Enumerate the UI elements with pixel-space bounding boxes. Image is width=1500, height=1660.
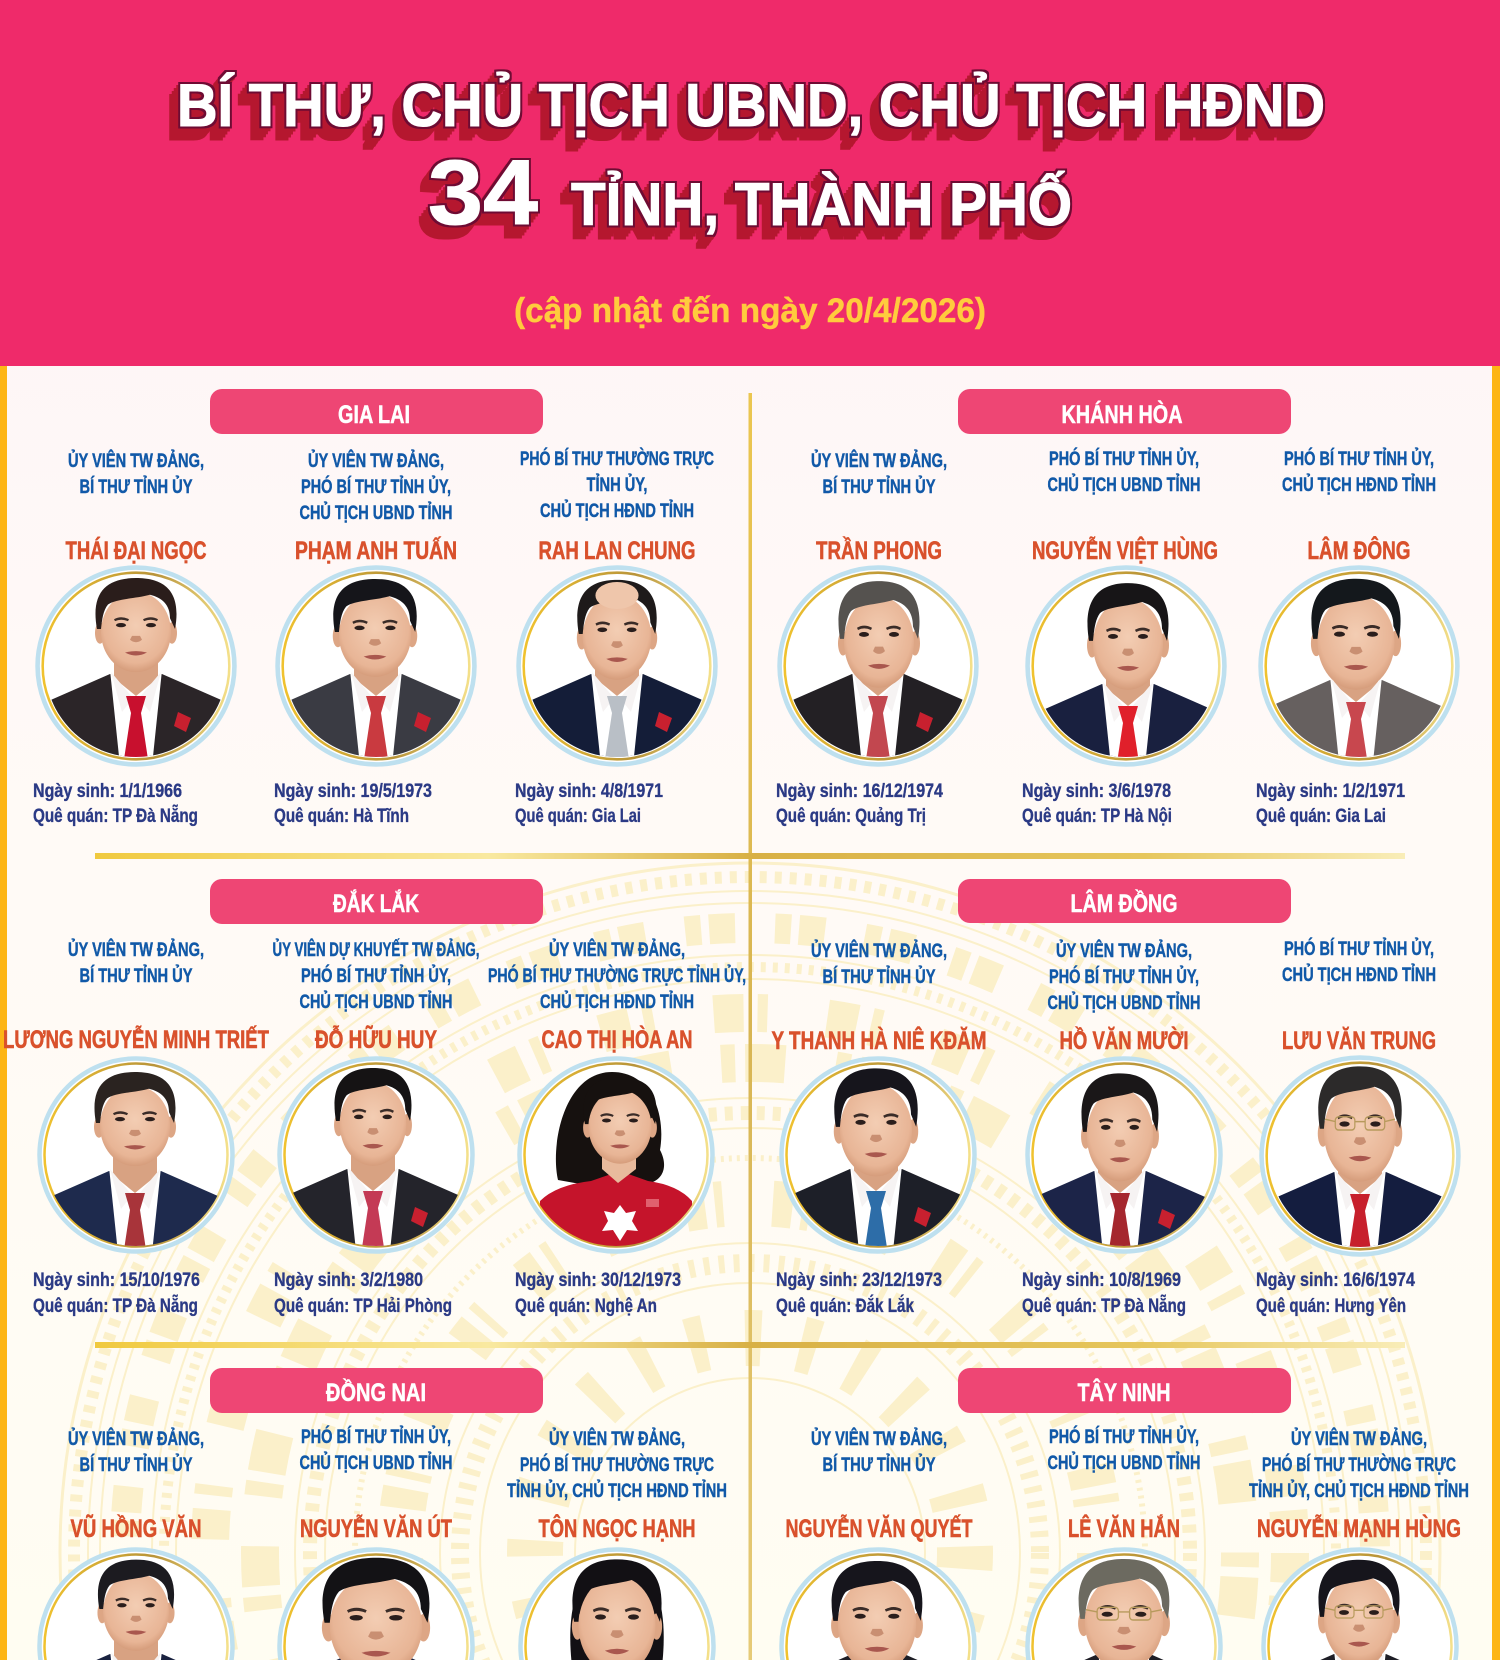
province label: Lâm Đồng: LÂM ĐỒNG: [1070, 888, 1178, 918]
person: Trần Phong: Ngày sinh: 16/12/1974: [776, 780, 943, 802]
person: Đỗ Hữu Huy: [272, 937, 480, 1317]
person: Hồ Văn Mười: CHỦ TỊCH UBND TỈNH: [1048, 990, 1200, 1014]
person: Hồ Văn Mười: Ngày sinh: 10/8/1969: [1022, 1269, 1181, 1291]
person: Tôn Ngọc Hạnh: [507, 1426, 727, 1660]
person: Cao Thị Hòa An: Ngày sinh: 30/12/1973: [515, 1269, 681, 1291]
title: [177, 72, 1325, 244]
province label: Khánh Hòa: KHÁNH HÒA: [1062, 399, 1182, 429]
person: Trần Phong: TRẦN PHONG: [816, 536, 942, 565]
person: Vũ Hồng Văn: [40, 1426, 232, 1660]
panel: Gia Lai: [33, 389, 715, 827]
person: Thái Đại Ngọc: Ngày sinh: 1/1/1966: [33, 780, 182, 802]
person: Rah Lan Chung: [515, 446, 715, 827]
person: Đỗ Hữu Huy: PHÓ BÍ THƯ TỈNH ỦY,: [301, 963, 451, 987]
person: Cao Thị Hòa An: [488, 937, 746, 1317]
person: Nguyễn Việt Hùng: Quê quán: TP Hà Nội: [1022, 805, 1172, 827]
person: Tôn Ngọc Hạnh: TÔN NGỌC HẠNH: [538, 1513, 696, 1543]
person: Trần Phong: BÍ THƯ TỈNH ỦY: [822, 474, 936, 498]
panel: Đồng Nai: [40, 1368, 727, 1660]
person: Trần Phong: ỦY VIÊN TW ĐẢNG,: [811, 448, 947, 472]
person: Cao Thị Hòa An: PHÓ BÍ THƯ THƯỜNG TRỰC TỈNH ỦY,: [488, 963, 746, 987]
person: Thái Đại Ngọc: BÍ THƯ TỈNH ỦY: [80, 474, 192, 498]
person: Lưu Văn Trung: [1256, 936, 1458, 1317]
person: Lưu Văn Trung: PHÓ BÍ THƯ TỈNH ỦY,: [1284, 936, 1434, 960]
person: Y Thanh Hà Niê Kđăm: Quê quán: Đắk Lắk: [776, 1293, 914, 1317]
person: Rah Lan Chung: Quê quán: Gia Lai: [515, 805, 641, 827]
person: Lâm Đông: PHÓ BÍ THƯ TỈNH ỦY,: [1284, 446, 1434, 470]
person: Rah Lan Chung: RAH LAN CHUNG: [538, 537, 696, 565]
title: TỈNH, THÀNH PHỐ: [571, 171, 1072, 238]
side bars: [0, 366, 1500, 1660]
person: Đỗ Hữu Huy: CHỦ TỊCH UBND TỈNH: [300, 989, 452, 1013]
person: Y Thanh Hà Niê Kđăm: [772, 938, 986, 1317]
person: Rah Lan Chung: Ngày sinh: 4/8/1971: [515, 780, 663, 802]
province label: Lâm Đồng: [958, 879, 1291, 923]
person: Trần Phong: [776, 448, 976, 827]
person: Lương Nguyễn Minh Triết: BÍ THƯ TỈNH ỦY: [80, 963, 192, 987]
person: Vũ Hồng Văn: ỦY VIÊN TW ĐẢNG,: [68, 1426, 204, 1450]
person: Thái Đại Ngọc: [33, 448, 234, 827]
person: Phạm Anh Tuấn: Quê quán: Hà Tĩnh: [274, 805, 409, 827]
panel: Khánh Hòa: [776, 389, 1457, 827]
person: Lâm Đông: LÂM ĐÔNG: [1308, 535, 1410, 565]
person: Đỗ Hữu Huy: Quê quán: TP Hải Phòng: [274, 1295, 452, 1317]
person: Lương Nguyễn Minh Triết: Quê quán: TP Đà Nẵng: [33, 1293, 198, 1317]
panel: Lâm Đồng: [772, 879, 1458, 1317]
person: Nguyễn Văn Quyết: BÍ THƯ TỈNH ỦY: [822, 1452, 936, 1476]
person: Đỗ Hữu Huy: ĐỖ HỮU HUY: [315, 1024, 437, 1054]
header band: [0, 0, 1500, 366]
person: Thái Đại Ngọc: Quê quán: TP Đà Nẵng: [33, 803, 198, 827]
person: Nguyễn Việt Hùng: CHỦ TỊCH UBND TỈNH: [1048, 472, 1200, 496]
person: Y Thanh Hà Niê Kđăm: ỦY VIÊN TW ĐẢNG,: [811, 938, 947, 962]
dividers: [95, 393, 1405, 1660]
title: 34: [428, 142, 538, 244]
person: Đỗ Hữu Huy: Ngày sinh: 3/2/1980: [274, 1269, 423, 1291]
person: Nguyễn Việt Hùng: PHÓ BÍ THƯ TỈNH ỦY,: [1049, 446, 1199, 470]
person: Phạm Anh Tuấn: ỦY VIÊN TW ĐẢNG,: [308, 448, 444, 472]
person: Lê Văn Hắn: PHÓ BÍ THƯ TỈNH ỦY,: [1049, 1424, 1199, 1448]
person: Nguyễn Văn Quyết: ỦY VIÊN TW ĐẢNG,: [811, 1426, 947, 1450]
person: Cao Thị Hòa An: CAO THỊ HÒA AN: [542, 1024, 692, 1054]
person: Thái Đại Ngọc: ỦY VIÊN TW ĐẢNG,: [68, 448, 204, 472]
person: Cao Thị Hòa An: Quê quán: Nghệ An: [515, 1295, 657, 1317]
person: Lưu Văn Trung: LƯU VĂN TRUNG: [1282, 1026, 1436, 1055]
update date: (cập nhật đến ngày 20/4/2026): [514, 292, 986, 330]
person: Phạm Anh Tuấn: CHỦ TỊCH UBND TỈNH: [300, 500, 452, 524]
person: Lương Nguyễn Minh Triết: Ngày sinh: 15/10/1976: [33, 1269, 200, 1291]
person: Trần Phong: Quê quán: Quảng Trị: [776, 805, 926, 827]
person: Hồ Văn Mười: HỒ VĂN MƯỜI: [1060, 1025, 1188, 1055]
province label: Tây Ninh: TÂY NINH: [1078, 1377, 1170, 1407]
province label: Gia Lai: GIA LAI: [338, 401, 410, 429]
person: Lâm Đông: [1256, 446, 1457, 827]
province label: Khánh Hòa: [958, 389, 1291, 434]
person: Nguyễn Văn Út: [280, 1424, 472, 1660]
person: Lưu Văn Trung: Ngày sinh: 16/6/1974: [1256, 1269, 1415, 1291]
person: Tôn Ngọc Hạnh: PHÓ BÍ THƯ THƯỜNG TRỰC: [520, 1452, 714, 1476]
person: Phạm Anh Tuấn: PHÓ BÍ THƯ TỈNH ỦY,: [301, 474, 451, 498]
person: Nguyễn Việt Hùng: Ngày sinh: 3/6/1978: [1022, 780, 1171, 802]
person: Đỗ Hữu Huy: ỦY VIÊN DỰ KHUYẾT TW ĐẢNG,: [272, 937, 480, 961]
province label: Đồng Nai: ĐỒNG NAI: [326, 1377, 426, 1407]
province label: Đắk Lắk: ĐẮK LẮK: [333, 888, 419, 918]
province label: Gia Lai: [210, 389, 543, 434]
person: Cao Thị Hòa An: CHỦ TỊCH HĐND TỈNH: [540, 989, 694, 1013]
person: Phạm Anh Tuấn: [274, 448, 474, 827]
person: Y Thanh Hà Niê Kđăm: BÍ THƯ TỈNH ỦY: [822, 964, 936, 988]
panel: Đắk Lắk: [3, 879, 746, 1317]
person: Nguyễn Văn Út: NGUYỄN VĂN ÚT: [300, 1513, 452, 1543]
person: Nguyễn Văn Út: CHỦ TỊCH UBND TỈNH: [300, 1450, 452, 1474]
person: Hồ Văn Mười: PHÓ BÍ THƯ TỈNH ỦY,: [1049, 964, 1199, 988]
person: Tôn Ngọc Hạnh: TỈNH ỦY, CHỦ TỊCH HĐND TỈNH: [507, 1478, 727, 1502]
person: Nguyễn Mạnh Hùng: [1249, 1426, 1469, 1660]
person: Lương Nguyễn Minh Triết: LƯƠNG NGUYỄN MINH TRIẾT: [3, 1024, 269, 1054]
person: Nguyễn Văn Quyết: [782, 1426, 974, 1660]
province label: Tây Ninh: [958, 1368, 1291, 1413]
person: Lương Nguyễn Minh Triết: [3, 937, 269, 1317]
person: Nguyễn Văn Quyết: NGUYỄN VĂN QUYẾT: [786, 1513, 972, 1543]
person: Phạm Anh Tuấn: PHẠM ANH TUẤN: [295, 536, 457, 565]
person: Y Thanh Hà Niê Kđăm: Ngày sinh: 23/12/1973: [776, 1269, 942, 1291]
person: Lê Văn Hắn: CHỦ TỊCH UBND TỈNH: [1048, 1450, 1200, 1474]
person: Vũ Hồng Văn: BÍ THƯ TỈNH ỦY: [80, 1452, 192, 1476]
person: Lâm Đông: Ngày sinh: 1/2/1971: [1256, 780, 1405, 802]
province label: Đồng Nai: [210, 1368, 543, 1413]
person: Cao Thị Hòa An: ỦY VIÊN TW ĐẢNG,: [549, 937, 685, 961]
person: Nguyễn Việt Hùng: [1022, 446, 1224, 827]
person: Hồ Văn Mười: ỦY VIÊN TW ĐẢNG,: [1056, 938, 1192, 962]
person: Lê Văn Hắn: [1028, 1424, 1220, 1660]
person: Rah Lan Chung: CHỦ TỊCH HĐND TỈNH: [540, 498, 694, 522]
person: Hồ Văn Mười: Quê quán: TP Đà Nẵng: [1022, 1293, 1186, 1317]
person: Lâm Đông: Quê quán: Gia Lai: [1256, 805, 1386, 827]
person: Nguyễn Văn Út: PHÓ BÍ THƯ TỈNH ỦY,: [301, 1424, 451, 1448]
background pattern: bronze drum: [60, 863, 1440, 1660]
person: Lâm Đông: CHỦ TỊCH HĐND TỈNH: [1282, 472, 1436, 496]
person: Rah Lan Chung: TỈNH ỦY,: [586, 472, 648, 496]
person: Nguyễn Việt Hùng: NGUYỄN VIỆT HÙNG: [1032, 535, 1218, 565]
person: Phạm Anh Tuấn: Ngày sinh: 19/5/1973: [274, 780, 432, 802]
person: Vũ Hồng Văn: VŨ HỒNG VĂN: [70, 1513, 202, 1543]
person: Lưu Văn Trung: Quê quán: Hưng Yên: [1256, 1295, 1406, 1317]
person: Tôn Ngọc Hạnh: ỦY VIÊN TW ĐẢNG,: [549, 1426, 685, 1450]
title: BÍ THƯ, CHỦ TỊCH UBND, CHỦ TỊCH HĐND: [177, 72, 1325, 139]
person: Rah Lan Chung: PHÓ BÍ THƯ THƯỜNG TRỰC: [520, 446, 714, 470]
person: Lương Nguyễn Minh Triết: ỦY VIÊN TW ĐẢNG,: [68, 937, 204, 961]
person: Y Thanh Hà Niê Kđăm: Y THANH HÀ NIÊ KĐĂM: [772, 1025, 986, 1055]
person: Nguyễn Mạnh Hùng: ỦY VIÊN TW ĐẢNG,: [1291, 1426, 1427, 1450]
panel: Tây Ninh: [782, 1368, 1469, 1660]
province label: Đắk Lắk: [210, 879, 543, 924]
person: Hồ Văn Mười: [1022, 938, 1220, 1317]
person: Thái Đại Ngọc: THÁI ĐẠI NGỌC: [66, 536, 206, 565]
person: Lưu Văn Trung: CHỦ TỊCH HĐND TỈNH: [1282, 962, 1436, 986]
person: Lê Văn Hắn: LÊ VĂN HẮN: [1068, 1513, 1180, 1543]
